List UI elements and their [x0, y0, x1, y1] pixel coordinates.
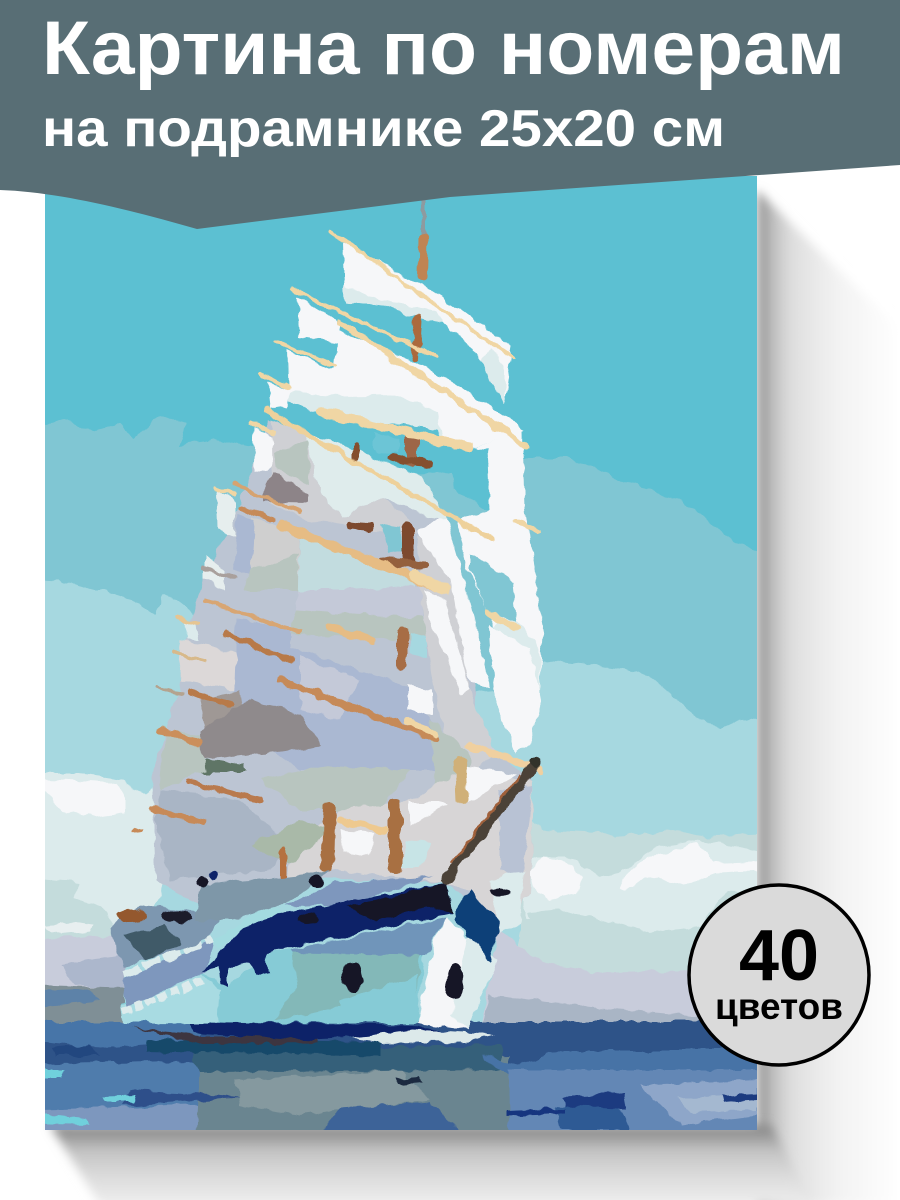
badge: 40 colours	[689, 885, 869, 1065]
title: Картина по номерам	[42, 6, 845, 91]
subtitle: на подрамнике 25х20 см	[42, 100, 725, 158]
cloud layers	[45, 416, 757, 1024]
canvas shadow	[50, 190, 900, 1200]
hull	[120, 877, 500, 1043]
sails middle tier	[180, 515, 495, 780]
sky showing through rig	[373, 433, 517, 657]
stern and deck details	[110, 870, 509, 967]
masts	[283, 200, 428, 875]
sails upper tiers	[217, 243, 543, 755]
sea	[45, 984, 757, 1130]
header banner	[0, 0, 900, 229]
badge: 40 colours: 40	[739, 916, 819, 996]
sails lower tier	[155, 620, 470, 880]
sails back mass	[152, 420, 533, 933]
badge: 40 colours: цветов	[715, 986, 843, 1027]
painting: sailing ship	[45, 176, 757, 1130]
foresail rigging area	[250, 767, 533, 933]
sky	[45, 176, 757, 552]
spars	[135, 232, 541, 880]
